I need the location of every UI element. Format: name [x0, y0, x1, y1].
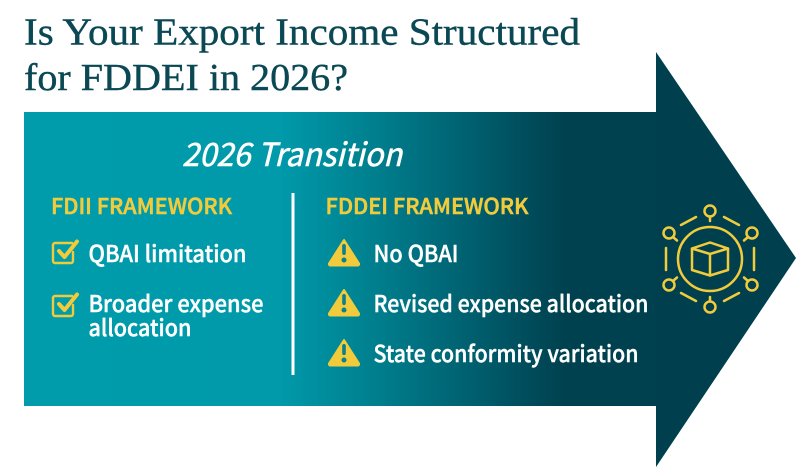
divider — [292, 193, 294, 375]
item: Broader expense allocation: Broader expense — [88, 285, 264, 319]
column: FDII framework — [51, 189, 264, 343]
item: State conformity variation: State conformity variation — [374, 335, 638, 369]
icon: warning — [329, 290, 359, 316]
item: Revised expense allocation: Revised expense allocation — [374, 285, 648, 319]
heading: FDDEI framework: FDDEI FRAMEWORK — [326, 189, 529, 221]
title: Is Your Export Income Structured — [24, 12, 580, 54]
heading: 2026 Transition: 2026 Transition — [182, 130, 403, 176]
icon: warning — [329, 240, 359, 266]
icon: network with box — [664, 206, 758, 312]
title: for FDDEI in 2026? — [24, 57, 348, 99]
title — [24, 12, 580, 99]
item: Broader expense allocation: allocation — [88, 309, 192, 343]
item: QBAI limitation: QBAI limitation — [88, 235, 246, 269]
item: No QBAI: No QBAI — [374, 235, 458, 269]
heading: FDII framework: FDII FRAMEWORK — [51, 189, 232, 221]
icon: checkbox — [53, 294, 77, 316]
icon: warning — [329, 340, 359, 366]
column: FDDEI framework — [326, 189, 648, 369]
icon: checkbox — [53, 242, 77, 263]
item: Broader expense allocation — [88, 285, 264, 343]
